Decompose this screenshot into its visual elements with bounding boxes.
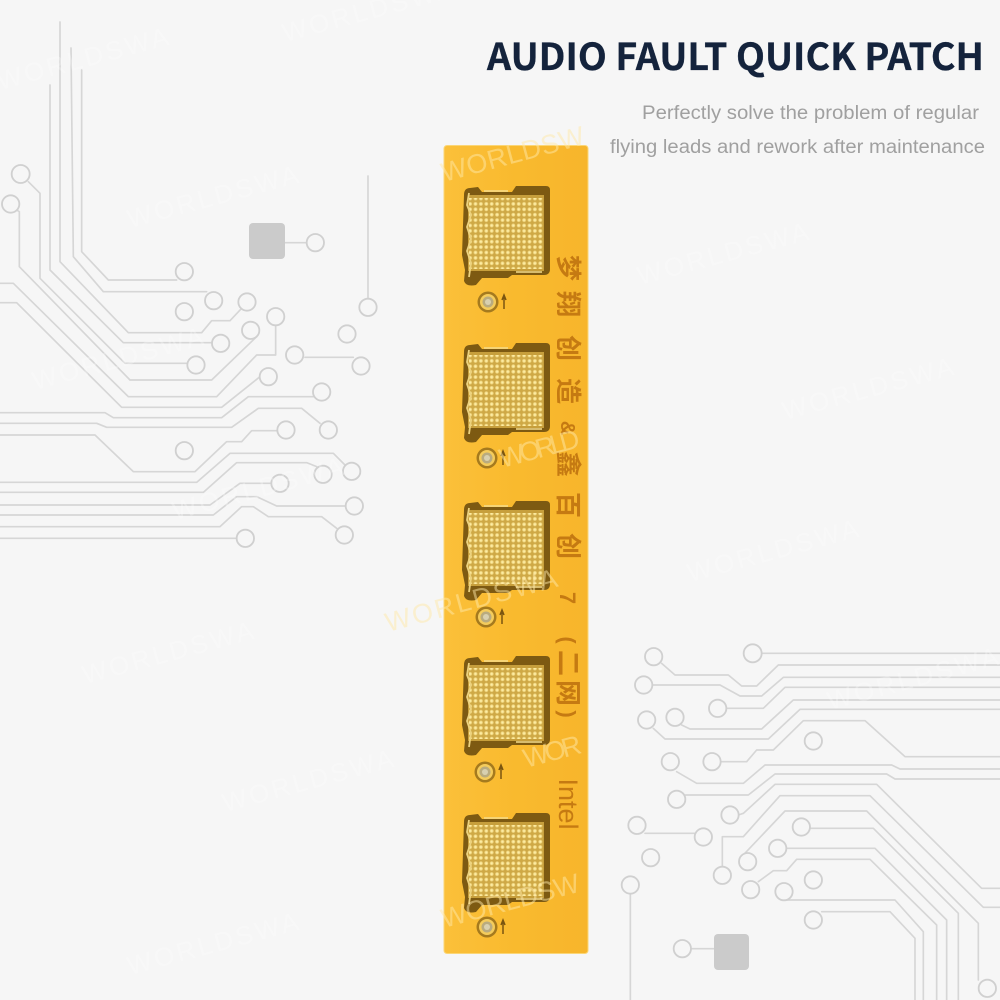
vertical printed label: 翔 bbox=[553, 291, 583, 317]
vertical printed label bbox=[553, 255, 583, 830]
vertical printed label: 梦 bbox=[553, 255, 583, 281]
via 5 bbox=[476, 916, 505, 938]
chip pad 2 bbox=[462, 343, 550, 442]
title: AUDIO FAULT QUICK PATCH bbox=[486, 27, 984, 81]
vertical printed label: 创 bbox=[553, 335, 583, 361]
vertical printed label: ) bbox=[555, 710, 580, 718]
chip pad 3 bbox=[462, 501, 550, 600]
background watermarks: WORLDSWA bbox=[779, 350, 959, 426]
subtitle bbox=[610, 103, 985, 158]
via 3 bbox=[476, 606, 504, 628]
strip watermarks: WORLDSWA bbox=[382, 562, 563, 638]
vertical printed label: 鑫 bbox=[553, 451, 583, 477]
strip body bbox=[444, 146, 588, 954]
subtitle: flying leads and rework after maintenance bbox=[610, 137, 985, 158]
vertical printed label: 网 bbox=[553, 680, 583, 706]
background watermarks: WORLDSWA bbox=[219, 742, 399, 818]
via 2 bbox=[476, 448, 505, 468]
strip watermarks bbox=[382, 120, 590, 934]
background watermarks: WORLDSWA bbox=[824, 640, 1000, 716]
background watermarks: WORLDSWA bbox=[29, 320, 209, 396]
background watermarks: WORLDSWA bbox=[169, 450, 349, 526]
vertical printed label: 百 bbox=[553, 492, 583, 518]
panel: yellow audio patch strip bbox=[382, 120, 590, 953]
chip pad 5 bbox=[462, 813, 550, 912]
strip watermarks: WORLDSW bbox=[438, 120, 590, 188]
icon: grey chip, lower right bbox=[714, 934, 749, 970]
strip watermarks: WORLD bbox=[496, 423, 586, 474]
vertical printed label: & bbox=[556, 421, 578, 435]
circuit traces: lower right bbox=[622, 644, 1000, 1000]
circuit traces: upper left bbox=[0, 22, 377, 547]
strip watermarks: WOR bbox=[520, 729, 587, 774]
vertical printed label: 7 bbox=[555, 592, 580, 604]
strip watermarks: WORLDSW bbox=[438, 867, 586, 934]
background watermarks: WORLDSWA bbox=[634, 215, 814, 291]
background watermarks: WORLDSWA bbox=[79, 614, 259, 690]
vertical printed label: 创 bbox=[553, 533, 583, 559]
background watermarks: WORLDSWA bbox=[684, 512, 864, 588]
background watermarks: WORLDSWA bbox=[124, 905, 304, 981]
subtitle: Perfectly solve the problem of regular bbox=[642, 103, 980, 124]
vertical printed label: ( bbox=[555, 636, 580, 644]
icon: grey chip, upper left bbox=[249, 223, 285, 259]
vertical printed label: 造 bbox=[553, 378, 583, 404]
chip pad 1 bbox=[462, 186, 550, 286]
via 1 bbox=[478, 292, 506, 312]
via 4 bbox=[474, 762, 503, 782]
background watermarks: WORLDSWA bbox=[124, 158, 304, 234]
vertical printed label: Intel bbox=[553, 778, 583, 830]
chip pad 4 bbox=[462, 656, 550, 756]
vertical printed label: 二 bbox=[553, 650, 583, 676]
